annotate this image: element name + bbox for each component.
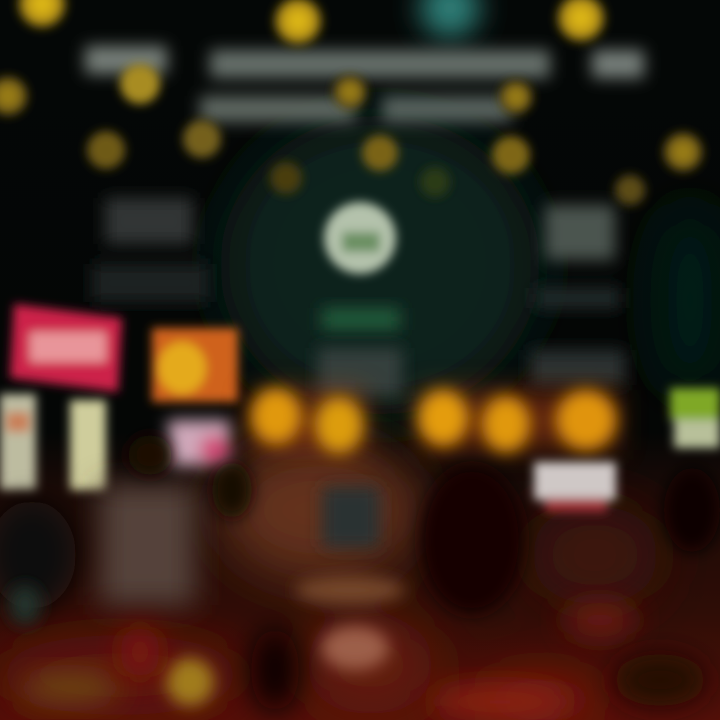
dark gaps: [251, 628, 299, 712]
orange glow around discs: [250, 390, 618, 450]
centre text: [318, 348, 402, 396]
top teal light: [420, 0, 480, 38]
panel: left column: [92, 198, 208, 302]
phone screen: [322, 486, 380, 548]
icon: centre circle: [324, 202, 396, 274]
panel: centre column: [318, 202, 402, 396]
sign: white and pink: [168, 420, 230, 466]
stage backdrop glow: [220, 115, 720, 415]
sign: left white cards: [0, 394, 106, 490]
dark head centre right: [420, 466, 524, 614]
sign: orange: [152, 328, 238, 402]
sign: white and red: [534, 462, 616, 512]
panel: right column: [530, 205, 625, 385]
dark head small: [212, 462, 252, 518]
sign: green and white: [670, 388, 720, 448]
yellow lights: [0, 0, 703, 205]
crowd tones: [0, 440, 660, 720]
title block: [85, 46, 644, 122]
row of yellow-orange discs: [251, 388, 616, 453]
beige figure left: [100, 485, 195, 605]
dark head far right: [664, 468, 720, 552]
crowd figures: [0, 435, 720, 718]
warm highlights: [295, 576, 405, 604]
centre green heading: [322, 308, 400, 330]
dark head left: [0, 501, 76, 609]
sign: pink: [10, 304, 122, 392]
